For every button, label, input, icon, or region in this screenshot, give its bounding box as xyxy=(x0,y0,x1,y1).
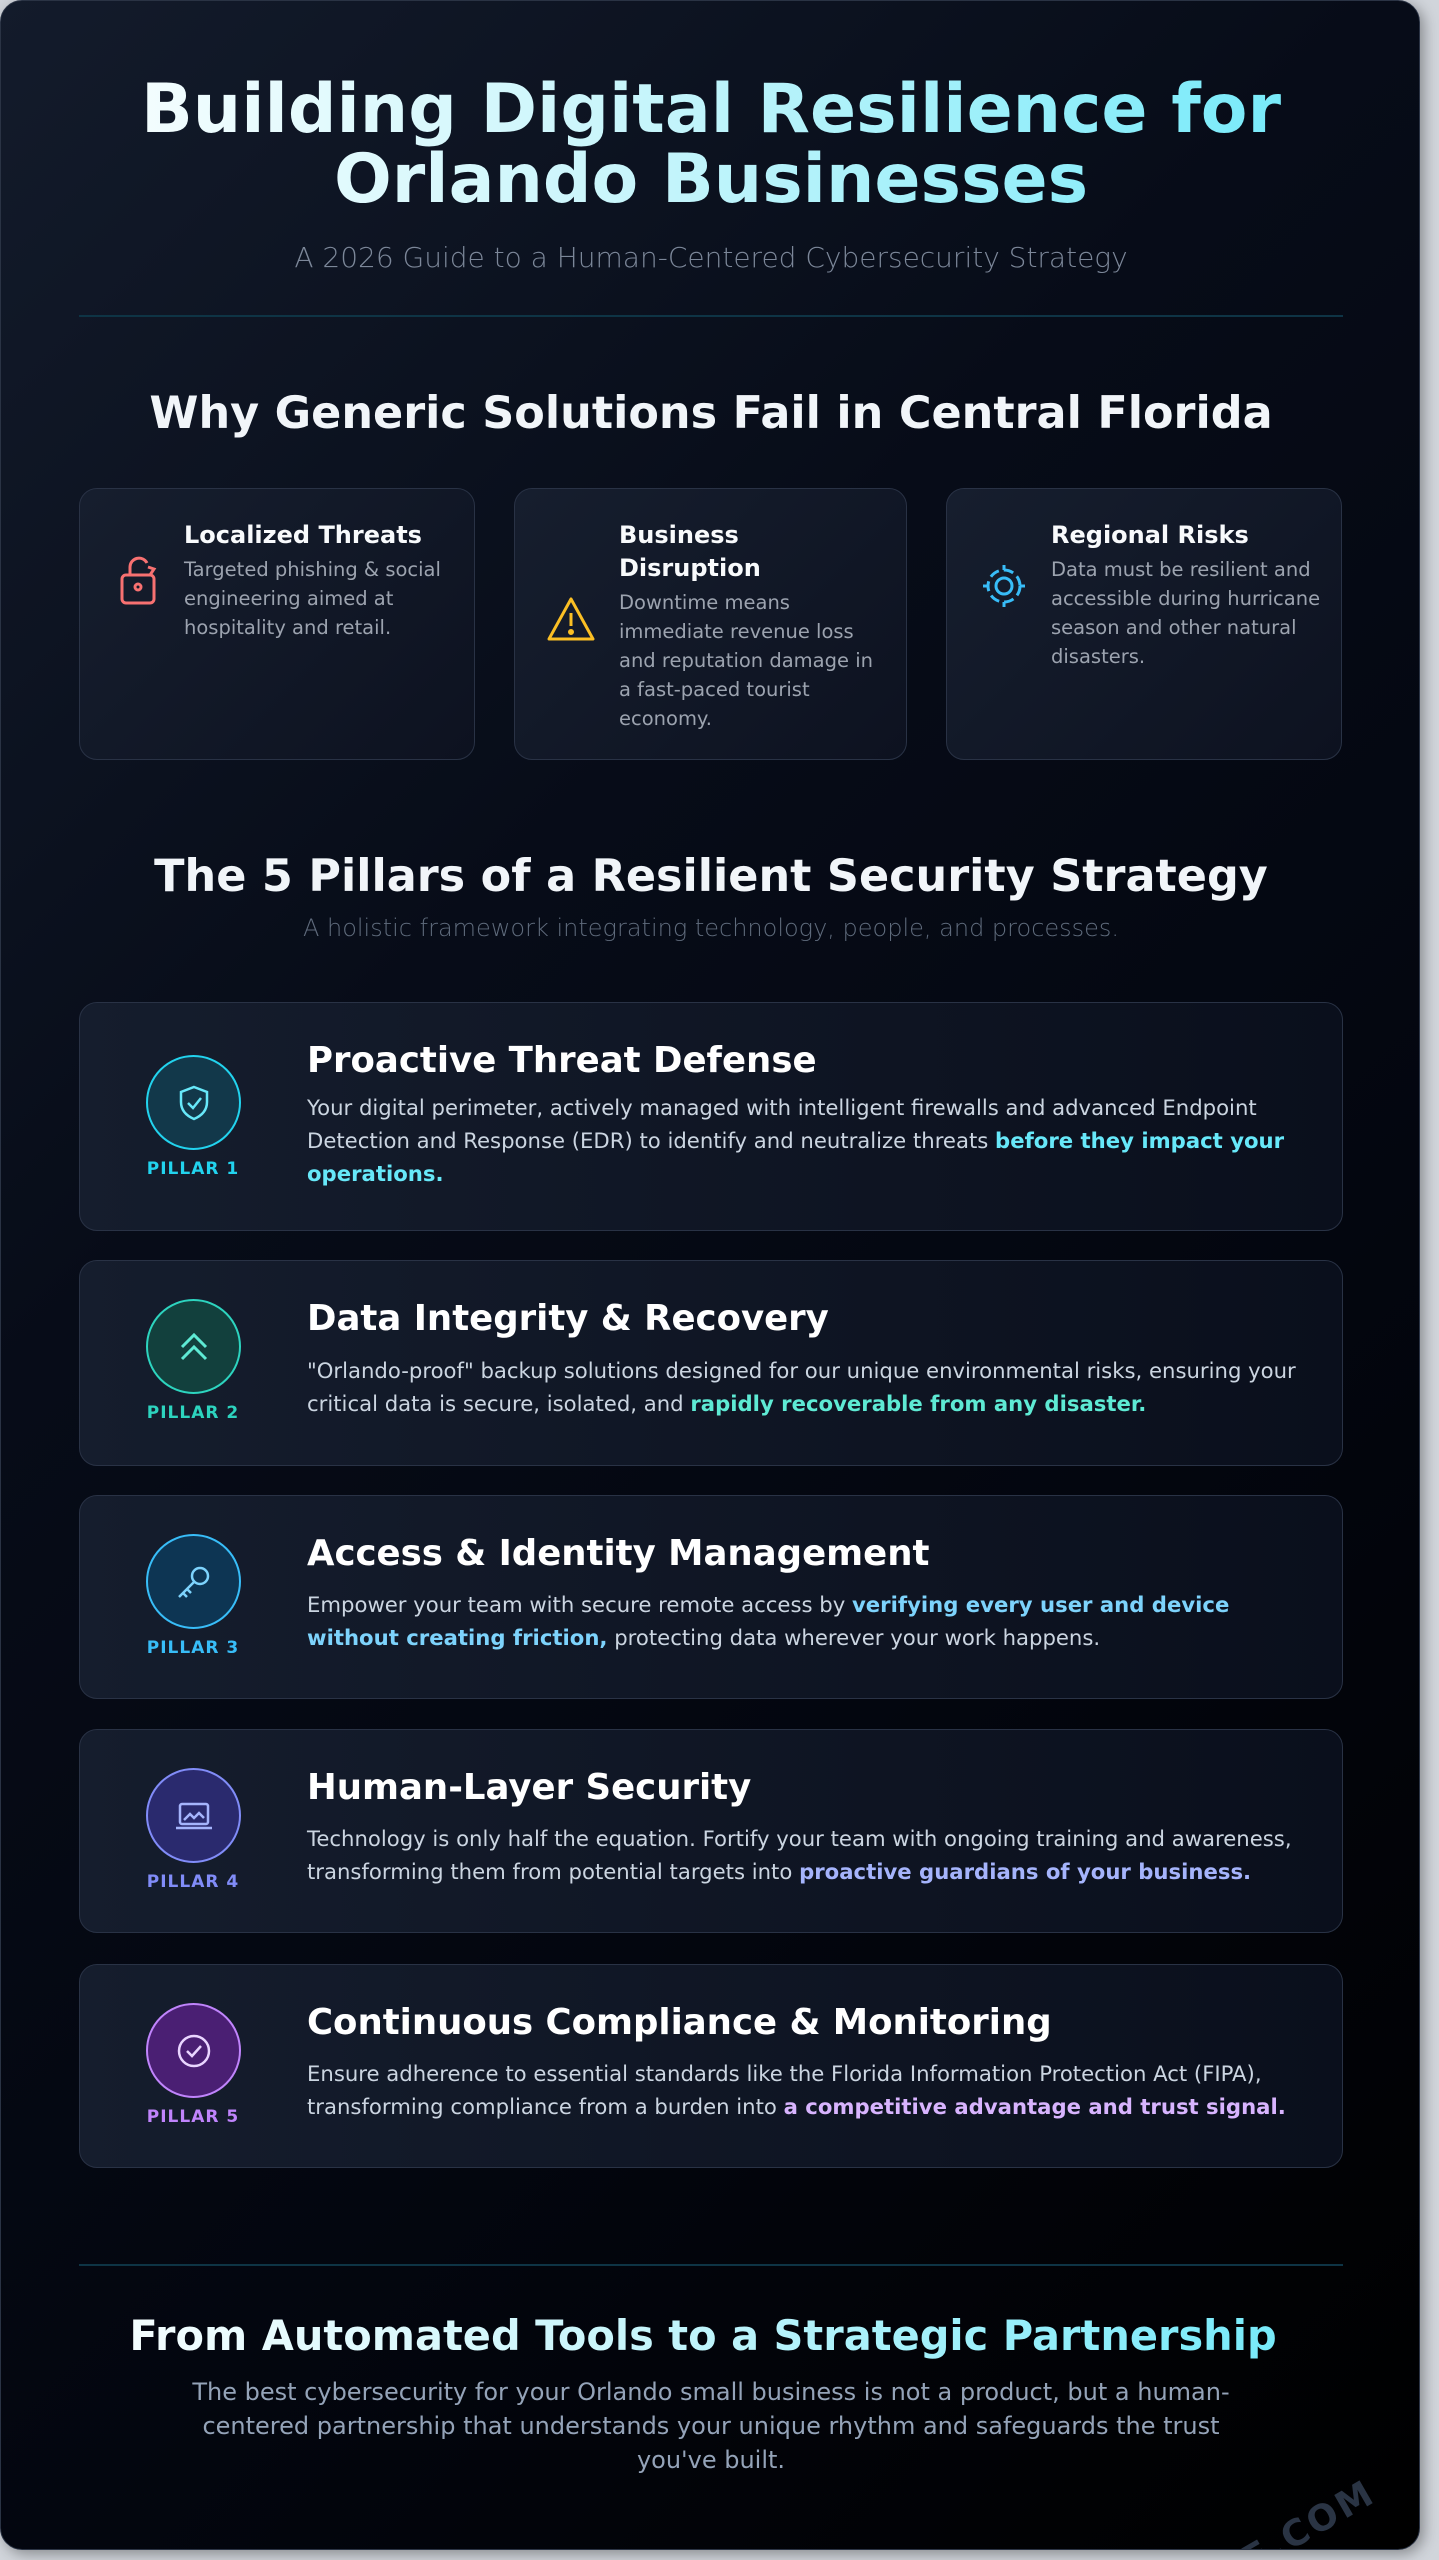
icon: laptop xyxy=(146,1768,241,1863)
pillar 3: Access & Identity Management xyxy=(307,1533,929,1574)
pillar 2: PILLAR 2 xyxy=(147,1403,239,1423)
panel: regional risks: Regional Risks xyxy=(1051,521,1249,549)
panel: localized threats: Localized Threats xyxy=(184,521,422,549)
pillar 5: Ensure adherence to essential standards like the Florida Information Protection Act (FIPA), transforming compliance from a burden into a competitive advantage and trust signal. xyxy=(307,2061,1286,2119)
pillar 4: Human-Layer Security xyxy=(307,1767,751,1808)
pillar 1: Proactive Threat Defense xyxy=(307,1040,817,1081)
pillar 1: Your digital perimeter, actively managed with intelligent firewalls and advanced Endpoint Detection and Response (EDR) to identify and neutralize threats before they impact your operations. xyxy=(307,1095,1284,1186)
icon: key xyxy=(146,1534,241,1629)
heading: strategic partnership: From Automated Tools to a Strategic Partnership xyxy=(129,2311,1277,2360)
panel: regional risks xyxy=(946,488,1342,760)
panel: regional risks: Data must be resilient and accessible during hurricane season and other natural disasters. xyxy=(1051,558,1320,668)
panel: localized threats xyxy=(79,488,475,760)
pillar 3 xyxy=(79,1495,1343,1699)
pillar 4 xyxy=(79,1729,1343,1933)
pillar 3: Empower your team with secure remote access by verifying every user and device without creating friction, protecting data wherever your work happens. xyxy=(307,1592,1229,1650)
panel: business disruption: Disruption xyxy=(619,554,761,582)
heading: strategic partnership xyxy=(1,2307,1405,2365)
heading: 5 pillars: The 5 Pillars of a Resilient Security Strategy xyxy=(154,851,1268,902)
pillar 4: PILLAR 4 xyxy=(147,1872,239,1892)
title xyxy=(1,75,1421,215)
pillar 1 xyxy=(79,1002,1343,1231)
subheading: A holistic framework integrating technology, people, and processes. xyxy=(303,914,1119,942)
pillar 5: Continuous Compliance & Monitoring xyxy=(307,2002,1052,2043)
pillar 5: PILLAR 5 xyxy=(147,2107,239,2127)
subtitle: A 2026 Guide to a Human-Centered Cybersecurity Strategy xyxy=(294,241,1128,274)
pillar 1: PILLAR 1 xyxy=(147,1159,239,1179)
panel: business disruption: Downtime means immediate revenue loss and reputation damage in a fast-paced tourist economy. xyxy=(619,591,873,730)
pillar 2: "Orlando-proof" backup solutions designed for our unique environmental risks, ensuring your critical data is secure, isolated, and rapidly recoverable from any disaster. xyxy=(307,1358,1296,1416)
panel: localized threats: Targeted phishing & social engineering aimed at hospitality and retail. xyxy=(184,558,441,639)
closing paragraph: The best cybersecurity for your Orlando small business is not a product, but a human-centered partnership that understands your unique rhythm and safeguards the trust you've built. xyxy=(192,2378,1230,2474)
panel: business disruption: Business xyxy=(619,521,739,549)
icon: chevrons up xyxy=(146,1299,241,1394)
icon: shield xyxy=(146,1055,241,1150)
pillar 5 xyxy=(79,1964,1343,2168)
pillar 2 xyxy=(79,1260,1343,1466)
icon: check circle xyxy=(146,2003,241,2098)
pillar 3: PILLAR 3 xyxy=(147,1638,239,1658)
heading: why generic solutions fail: Why Generic Solutions Fail in Central Florida xyxy=(149,388,1273,439)
pillar 4: Technology is only half the equation. Fortify your team with ongoing training and awareness, transforming them from potential targets into proactive guardians of your business. xyxy=(307,1826,1292,1884)
icon: warning xyxy=(548,597,595,640)
icon: lock xyxy=(120,556,156,604)
panel: business disruption xyxy=(514,488,907,760)
title: Building Digital Resilience for xyxy=(141,70,1281,149)
title: Orlando Businesses xyxy=(334,140,1088,219)
pillar 2: Data Integrity & Recovery xyxy=(307,1298,829,1339)
icon: gear xyxy=(983,565,1025,607)
